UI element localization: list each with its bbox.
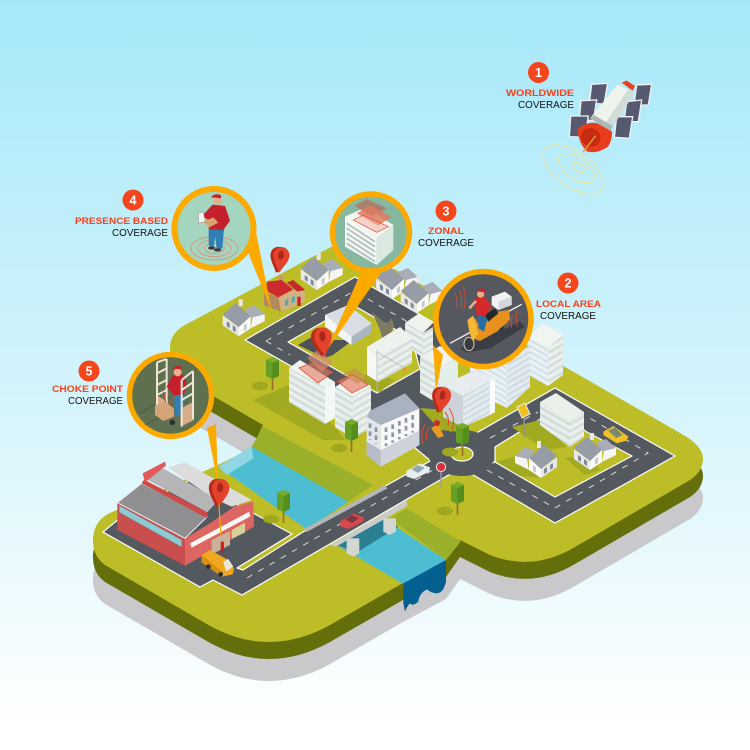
label 3: zonal coverage: 3	[443, 204, 450, 218]
lower beam	[330, 500, 407, 547]
tall block right	[528, 323, 563, 386]
seat	[485, 308, 498, 322]
upper loop road	[245, 277, 455, 462]
light roof	[168, 462, 252, 507]
label 3: zonal coverage	[418, 200, 474, 249]
tree centre	[331, 419, 358, 452]
label 4: presence based coverage	[75, 190, 168, 239]
worker	[221, 542, 224, 552]
collar ring	[590, 115, 613, 132]
label 2: local area coverage: 2	[565, 276, 572, 290]
front gate	[181, 371, 194, 427]
hand truck	[163, 392, 175, 420]
upper rail	[303, 485, 387, 532]
label 2: local area coverage: COVERAGE	[540, 311, 596, 322]
left wall	[117, 503, 185, 566]
platform grass surface	[93, 240, 703, 642]
rear gate	[156, 359, 168, 420]
top red zone	[354, 199, 387, 217]
parking and shadows	[253, 372, 600, 478]
courier figure	[198, 194, 230, 252]
civic building in loop	[325, 305, 372, 345]
mid roof	[145, 468, 218, 512]
statue silhouette	[372, 312, 394, 338]
block behind pin 2	[420, 346, 458, 405]
buildings behind	[367, 314, 584, 447]
callout tails	[207, 222, 443, 484]
front wheel	[464, 337, 474, 351]
roundabout centre island	[451, 447, 473, 461]
callout 2: local area	[436, 272, 531, 366]
building roof	[345, 208, 393, 238]
label 5: choke point coverage: 5	[86, 364, 93, 378]
doorway	[212, 531, 230, 554]
roundabout	[428, 430, 496, 476]
label 5: choke point coverage: CHOKE POINT	[52, 384, 123, 395]
house back right	[401, 276, 443, 313]
floor ripple rings	[191, 237, 238, 260]
delivery van	[202, 550, 234, 577]
scooter front	[467, 316, 478, 341]
zonal block 1	[289, 350, 335, 424]
lower right island	[495, 410, 632, 497]
rider torso	[475, 297, 492, 317]
tail 4	[248, 222, 272, 312]
road network	[103, 277, 675, 595]
scooter rider on road	[422, 408, 453, 444]
callout 3: zonal	[332, 194, 410, 271]
house front left	[223, 299, 265, 336]
label 1: worldwide coverage: 1	[535, 66, 542, 80]
block in diamond island	[540, 393, 584, 447]
platform drop shadow	[93, 279, 703, 681]
main dark roof	[117, 483, 207, 538]
label 2: local area coverage: LOCAL AREA	[536, 299, 601, 310]
tail 2	[433, 345, 443, 392]
house left	[515, 441, 557, 478]
lower bank	[390, 508, 461, 560]
window band	[119, 506, 182, 547]
red roof house	[264, 276, 305, 312]
tree south of roundabout	[437, 482, 464, 516]
antenna	[583, 136, 596, 152]
house right	[574, 433, 616, 470]
worker torso	[167, 373, 187, 395]
yellow road sign	[517, 403, 530, 437]
near river section	[337, 518, 446, 584]
dark parking under civic building	[298, 338, 353, 358]
loop island	[288, 305, 420, 393]
label 4: presence based coverage: PRESENCE BASED	[75, 216, 168, 227]
worker head	[174, 368, 182, 376]
satellite	[535, 81, 652, 204]
island platform	[93, 240, 703, 681]
zonal buildings	[289, 350, 371, 438]
red car	[340, 513, 364, 529]
awning	[190, 512, 250, 548]
wide blue striped block	[470, 345, 530, 408]
red trim	[142, 480, 207, 518]
rider cap	[477, 288, 485, 293]
floor shadow lines	[140, 397, 187, 425]
delivery box	[492, 292, 512, 310]
front wall	[185, 502, 254, 566]
bridge piers	[347, 518, 396, 557]
no entry sign	[436, 462, 446, 487]
building right face	[377, 225, 393, 265]
top red cap	[622, 81, 635, 91]
label 4: presence based coverage: COVERAGE	[112, 228, 168, 239]
worker cap	[172, 366, 181, 370]
road line	[450, 304, 522, 343]
pin 5	[207, 478, 230, 508]
house near zone circle	[376, 262, 418, 299]
mid block with pole	[367, 327, 412, 392]
label 5: choke point coverage	[52, 360, 123, 407]
callout 4: presence based	[174, 189, 254, 268]
light block near roundabout	[443, 370, 495, 427]
body shade	[604, 89, 635, 129]
tree left	[252, 357, 279, 390]
solar panels	[569, 83, 652, 138]
trolley wheel	[170, 420, 175, 425]
rider arm	[469, 301, 476, 308]
label 2: local area coverage	[536, 272, 601, 322]
trees	[252, 357, 469, 524]
label 1: worldwide coverage	[506, 62, 575, 111]
label 1: worldwide coverage: COVERAGE	[518, 100, 574, 111]
Haussmann corner building	[367, 393, 419, 467]
scooter body	[469, 310, 510, 341]
warehouse yard and bridge road	[103, 460, 452, 595]
middle red zone	[357, 206, 392, 226]
lower right road loop	[470, 388, 675, 523]
rear wheel	[496, 324, 504, 330]
pin 2	[429, 385, 452, 414]
pin 4	[268, 246, 291, 274]
far river section	[218, 447, 348, 529]
warehouse	[117, 462, 254, 566]
dish	[578, 123, 612, 152]
satellite body	[590, 85, 635, 129]
building stripes	[347, 223, 375, 262]
bridge deck	[303, 485, 407, 547]
label 3: zonal coverage: ZONAL	[428, 226, 464, 237]
boxes	[155, 402, 174, 421]
rider head	[477, 290, 484, 298]
river highlight	[218, 447, 253, 475]
roof red outline	[353, 215, 388, 232]
house far back left	[301, 253, 343, 290]
label 1: worldwide coverage: WORLDWIDE	[506, 88, 575, 99]
zonal block 2	[335, 368, 371, 438]
tail 3	[327, 270, 383, 350]
top red trim	[143, 462, 166, 482]
shop window	[232, 523, 245, 539]
platform side edge	[93, 257, 703, 659]
location pins	[207, 246, 452, 508]
tree by river	[263, 490, 290, 524]
worker legs	[174, 393, 185, 417]
vehicles on road	[340, 463, 430, 529]
pin 5 stem	[219, 505, 221, 536]
label 5: choke point coverage: COVERAGE	[68, 396, 123, 407]
scooter shadow	[460, 322, 525, 352]
signal waves	[455, 286, 517, 328]
waterfall edge	[403, 560, 446, 612]
dish inside	[578, 125, 604, 150]
label 4: presence based coverage: 4	[130, 194, 137, 208]
roundabout connector	[428, 430, 490, 473]
tall block centre	[405, 314, 433, 358]
rider legs	[478, 315, 487, 332]
river and banks	[218, 427, 461, 612]
tree on roundabout	[442, 423, 469, 456]
upper bank	[252, 427, 373, 502]
shadow under the bridge	[337, 518, 398, 553]
pin 3	[310, 327, 334, 357]
building left face	[345, 217, 377, 265]
tail 5	[207, 424, 218, 484]
houses row	[223, 253, 443, 336]
white car	[406, 463, 430, 479]
road centre dashes	[247, 291, 648, 578]
yellow taxi	[603, 426, 628, 443]
houses in lower right island	[515, 433, 616, 478]
signal ripples	[535, 135, 612, 204]
callout 5: choke point	[130, 354, 212, 436]
label 3: zonal coverage: COVERAGE	[418, 238, 474, 249]
